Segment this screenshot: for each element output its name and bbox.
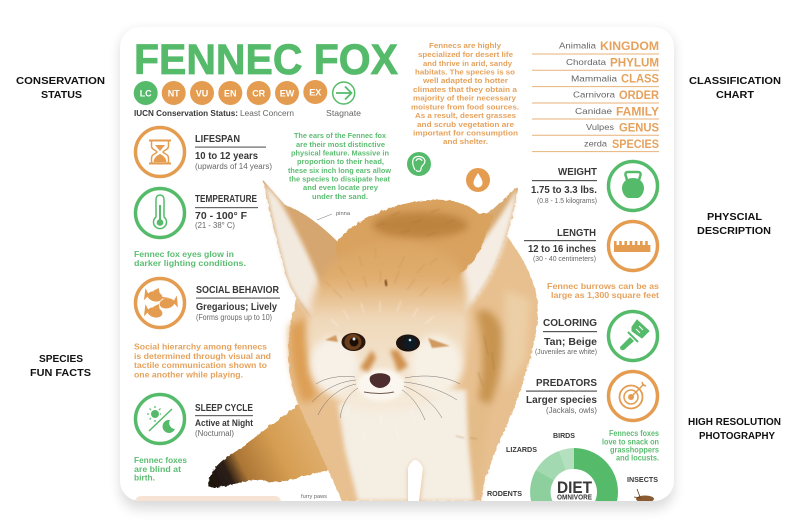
panel: temperature xyxy=(136,188,258,238)
photo: fennec fox xyxy=(209,180,538,501)
chart: diet donut: RODENTS xyxy=(487,489,522,498)
text: eyes glow: Fennec fox eyes glow in xyxy=(134,249,234,259)
conservation status badges: VU xyxy=(196,88,208,98)
conservation status badges: CR xyxy=(252,88,266,98)
conservation status badges: LC xyxy=(140,88,152,98)
label: conservation status xyxy=(16,75,105,101)
classification chart: FAMILY xyxy=(616,104,659,118)
panel: temperature: TEMPERATURE xyxy=(195,193,257,205)
panel: sleep cycle: Active at Night xyxy=(195,418,253,428)
text: desert habitat: well adapted to hotter xyxy=(422,76,508,85)
chart: diet donut: BIRDS xyxy=(553,431,575,440)
chart: diet donut xyxy=(487,431,658,529)
label: species fun facts xyxy=(30,353,91,379)
text: ears of the fennec fox xyxy=(288,131,391,201)
text: grasshoppers: Fennecs foxes xyxy=(609,429,659,438)
body xyxy=(288,232,538,501)
icon: ear xyxy=(407,152,431,176)
text: ears of the fennec fox: under the sand. xyxy=(312,192,368,201)
panel: predators xyxy=(526,372,658,420)
right ear xyxy=(461,188,518,304)
classification chart: Animalia xyxy=(559,40,596,50)
nose xyxy=(370,373,390,388)
panel: temperature: (21 - 38° C) xyxy=(195,221,235,230)
text: burrows xyxy=(547,281,659,300)
text: ears of the fennec fox: the species to dissipate heat xyxy=(289,174,390,184)
conservation status text: IUCN Conservation Status: xyxy=(134,109,238,118)
panel: coloring: Tan; Beige xyxy=(544,336,597,348)
conservation status badges xyxy=(134,80,327,105)
panel: length: LENGTH xyxy=(557,227,596,239)
text: social hierarchy xyxy=(134,342,271,380)
fur marks xyxy=(385,280,387,286)
panel: sleep cycle: (Nocturnal) xyxy=(195,429,234,438)
label: species fun facts: FUN FACTS xyxy=(30,367,91,379)
text: desert habitat: important for consumption xyxy=(413,128,518,138)
left eye xyxy=(342,333,366,351)
head xyxy=(307,244,468,413)
classification chart: SPECIES xyxy=(612,137,659,151)
annotation: pinna xyxy=(317,211,350,220)
panel: length: (30 - 40 centimeters) xyxy=(533,256,596,263)
label: species fun facts: SPECIES xyxy=(39,353,83,365)
classification chart: Mammalia xyxy=(571,74,617,84)
bottom panel peek xyxy=(135,496,281,501)
panel: lifespan xyxy=(136,128,272,176)
icon: thermometer xyxy=(136,188,184,238)
label: classification chart: CHART xyxy=(716,89,755,101)
conservation status text: Stagnate xyxy=(326,109,362,118)
classification chart: Vulpes xyxy=(586,122,614,132)
fur streaks xyxy=(326,275,448,298)
text: blind at birth: are blind at xyxy=(134,464,181,474)
classification chart: CLASS xyxy=(621,72,659,86)
annotation: pinna: pinna xyxy=(336,211,350,217)
conservation status badges: EW xyxy=(280,88,295,98)
text: ears of the fennec fox: The ears of the Fennec fox xyxy=(294,131,387,140)
text: desert habitat xyxy=(411,41,519,146)
classification chart: PHYLUM xyxy=(610,56,659,70)
text: desert habitat: moisture from food sources. xyxy=(411,102,519,112)
panel: predators: PREDATORS xyxy=(536,377,597,389)
icon: sun and moon xyxy=(136,394,184,444)
classification chart: Chordata xyxy=(566,57,606,67)
panel: social behavior: Gregarious; Lively xyxy=(196,302,277,313)
label: classification chart: CLASSIFICATION xyxy=(689,75,781,87)
text: burrows: Fennec burrows can be as xyxy=(547,281,659,291)
panel: weight xyxy=(531,162,658,210)
panel: sleep cycle xyxy=(136,394,253,444)
label: high resolution photography: PHOTOGRAPHY xyxy=(699,430,775,442)
chart: diet donut: OMNIVORE xyxy=(557,494,592,502)
chart: diet donut: INSECTS xyxy=(627,475,658,484)
title: FENNEC FOX xyxy=(134,36,398,84)
text: desert habitat: specialized for desert life xyxy=(418,50,513,59)
text: desert habitat: and shelter. xyxy=(443,137,488,146)
text: grasshoppers: and locusts. xyxy=(616,454,659,462)
text: grasshoppers xyxy=(602,429,660,462)
panel: social behavior: SOCIAL BEHAVIOR xyxy=(196,284,279,296)
annotation: furry paws: furry paws xyxy=(301,494,328,500)
text: ears of the fennec fox: and even locate prey xyxy=(303,183,379,192)
panel: coloring: COLORING xyxy=(543,317,597,329)
panel: lifespan: 10 to 12 years xyxy=(195,150,258,162)
face markings xyxy=(360,350,408,372)
classification chart: ORDER xyxy=(619,88,659,102)
label: high resolution photography xyxy=(688,416,781,442)
icon: cricket xyxy=(634,489,654,502)
text: blind at birth: Fennec foxes xyxy=(134,455,187,465)
label: physical description: PHYSCIAL xyxy=(707,211,763,223)
panel: coloring xyxy=(535,312,658,360)
back xyxy=(336,199,494,275)
classification chart: Canidae xyxy=(575,106,612,116)
text: blind at birth: birth. xyxy=(134,472,155,482)
text: desert habitat: As a result, desert grasses xyxy=(415,111,516,120)
text: social hierarchy: one another while playing. xyxy=(134,370,243,380)
text: ears of the fennec fox: physical feature. Massive in xyxy=(291,148,389,158)
classification chart: zerda xyxy=(584,138,607,148)
text: desert habitat: and thrive in arid, sandy xyxy=(423,59,513,68)
classification chart xyxy=(532,39,659,152)
whiskers xyxy=(312,376,460,420)
card panel xyxy=(120,27,674,509)
text: ears of the fennec fox: are their most distinctive xyxy=(296,140,385,149)
label: physical description xyxy=(697,211,771,237)
panel: weight: WEIGHT xyxy=(558,166,598,178)
text: burrows: large as 1,300 square feet xyxy=(551,290,659,300)
chart: diet donut: LIZARDS xyxy=(506,445,537,454)
classification chart: Carnivora xyxy=(573,90,615,100)
body shading xyxy=(290,290,530,500)
text: social hierarchy: is determined through visual and xyxy=(134,351,271,361)
icon: stagnate arrow xyxy=(333,82,355,104)
text: blind at birth xyxy=(134,457,187,480)
text: desert habitat: climates that they obtain a xyxy=(413,85,518,94)
text: grasshoppers: grasshoppers xyxy=(610,446,660,454)
label: conservation status: STATUS xyxy=(41,89,82,101)
panel: coloring: (Juveniles are white) xyxy=(535,349,597,356)
conservation status badges: EN xyxy=(224,88,237,98)
conservation status badges: EX xyxy=(309,88,321,98)
icon: target xyxy=(608,372,658,420)
panel: lifespan: LIFESPAN xyxy=(195,133,240,145)
panel: sleep cycle: SLEEP CYCLE xyxy=(195,402,253,414)
panel: predators: (Jackals, owls) xyxy=(546,406,597,415)
cheeks xyxy=(310,337,358,393)
left ear xyxy=(262,180,338,316)
text: eyes glow: darker lighting conditions. xyxy=(134,258,246,268)
classification chart: KINGDOM xyxy=(600,39,659,53)
gap between legs xyxy=(408,460,423,501)
panel: social behavior: (Forms groups up to 10) xyxy=(196,313,272,322)
chart: diet donut: DIET xyxy=(557,478,593,497)
panel: social behavior xyxy=(136,278,280,328)
panel: length xyxy=(524,222,658,270)
text: desert habitat: and scrub vegetation are xyxy=(417,120,514,129)
icon: ruler xyxy=(608,222,658,270)
text: desert habitat: Fennecs are highly xyxy=(429,41,502,50)
label: conservation status: CONSERVATION xyxy=(16,75,105,87)
classification chart: GENUS xyxy=(619,120,659,134)
label: classification chart xyxy=(689,75,781,101)
icon: kettlebell xyxy=(608,162,658,210)
text: grasshoppers: love to snack on xyxy=(602,438,659,446)
panel: length: 12 to 16 inches xyxy=(528,243,596,255)
panel: weight: 1.75 to 3.3 lbs. xyxy=(531,184,597,196)
conservation status text: Least Concern xyxy=(240,109,294,118)
tail xyxy=(208,404,328,488)
text: eyes glow xyxy=(134,251,246,268)
text: ears of the fennec fox: these six inch long ears allow xyxy=(288,166,391,175)
text: social hierarchy: Social hierarchy among fennecs xyxy=(134,342,267,352)
panel: temperature: 70 - 100° F xyxy=(195,210,248,222)
chest and legs xyxy=(338,385,474,501)
text: social hierarchy: tactile communication shown to xyxy=(134,360,267,370)
icon: water drop xyxy=(466,168,490,192)
icon: hourglass xyxy=(136,128,184,176)
panel: lifespan: (upwards of 14 years) xyxy=(195,162,272,171)
text: desert habitat: majority of their necessary xyxy=(413,94,517,102)
conservation status badges: NT xyxy=(168,88,180,98)
panel: predators: Larger species xyxy=(526,394,597,406)
text: ears of the fennec fox: proportion to their head, xyxy=(297,157,384,166)
right eye xyxy=(396,334,420,352)
label: physical description: DESCRIPTION xyxy=(697,225,771,237)
icon: fish group xyxy=(136,278,184,328)
label: high resolution photography: HIGH RESOLUTION xyxy=(688,416,781,428)
text: desert habitat: habitats. The species is so xyxy=(415,68,515,76)
icon: paint brush xyxy=(608,312,658,360)
panel: weight: (0.8 - 1.5 kilograms) xyxy=(537,198,597,205)
conservation status text xyxy=(134,110,361,118)
